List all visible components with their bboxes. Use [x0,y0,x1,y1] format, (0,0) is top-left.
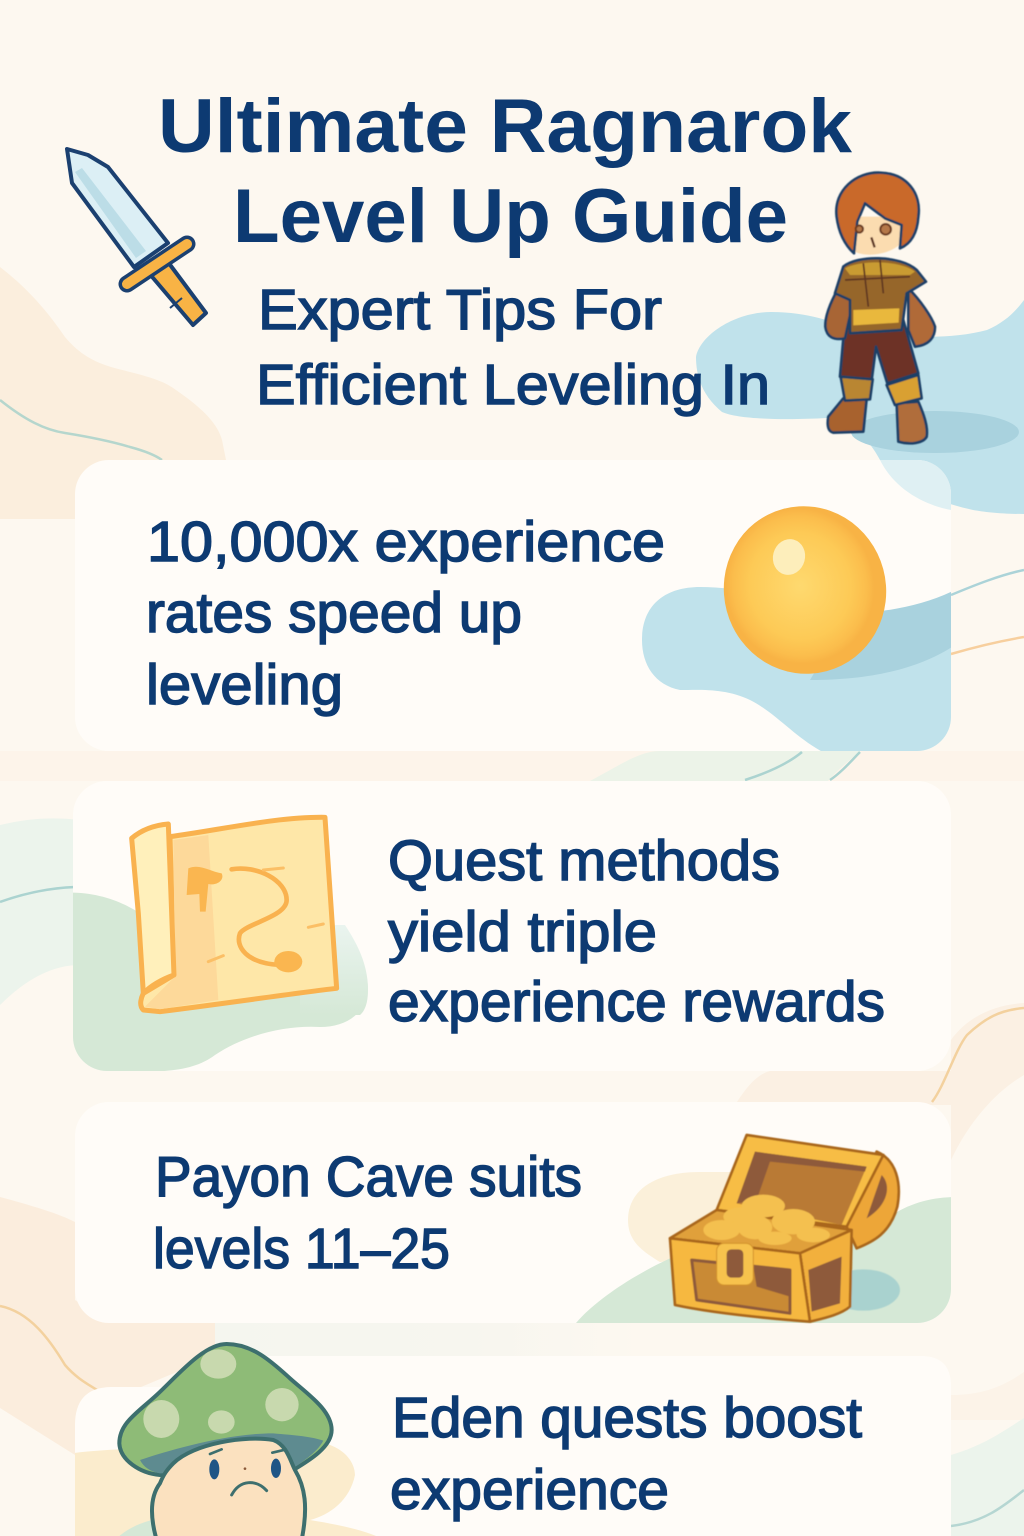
text: Payon Cave suits [155,1145,582,1209]
card backdrop [642,460,960,760]
shadow under hero [851,411,1019,453]
text [388,829,885,1034]
text: rates speed up [146,581,522,645]
title: Ultimate Ragnarok [158,84,853,169]
card backdrop [576,1172,955,1330]
text: 10,000x experience [147,510,665,574]
subtitle: Efficient Leveling In [256,353,770,417]
icon: sword [67,149,206,325]
text: levels 11–25 [153,1217,450,1281]
subtitle [256,278,770,417]
subtitle: Expert Tips For [258,278,662,342]
icon: mushroom monster [119,1344,332,1536]
text: yield triple [388,900,657,964]
panel: eden quests [60,1344,951,1536]
text [390,1386,862,1522]
icon: golden orb [705,488,905,692]
card backdrop [75,1444,376,1536]
icon: hero character [825,173,935,443]
icon: treasure map [132,817,337,1012]
text: experience rewards [388,970,885,1034]
card backdrop [60,893,368,1072]
title [158,84,853,259]
panel: quest methods [60,781,951,1072]
panel: payon cave [75,1102,955,1330]
text [153,1145,582,1281]
text: leveling [146,653,343,717]
icon: treasure chest [670,1135,900,1322]
panel: experience rates [75,460,960,760]
text: Eden quests boost [392,1386,862,1450]
text: experience [390,1458,669,1522]
text: Quest methods [388,829,780,893]
text [146,510,665,717]
title: Level Up Guide [233,174,788,259]
